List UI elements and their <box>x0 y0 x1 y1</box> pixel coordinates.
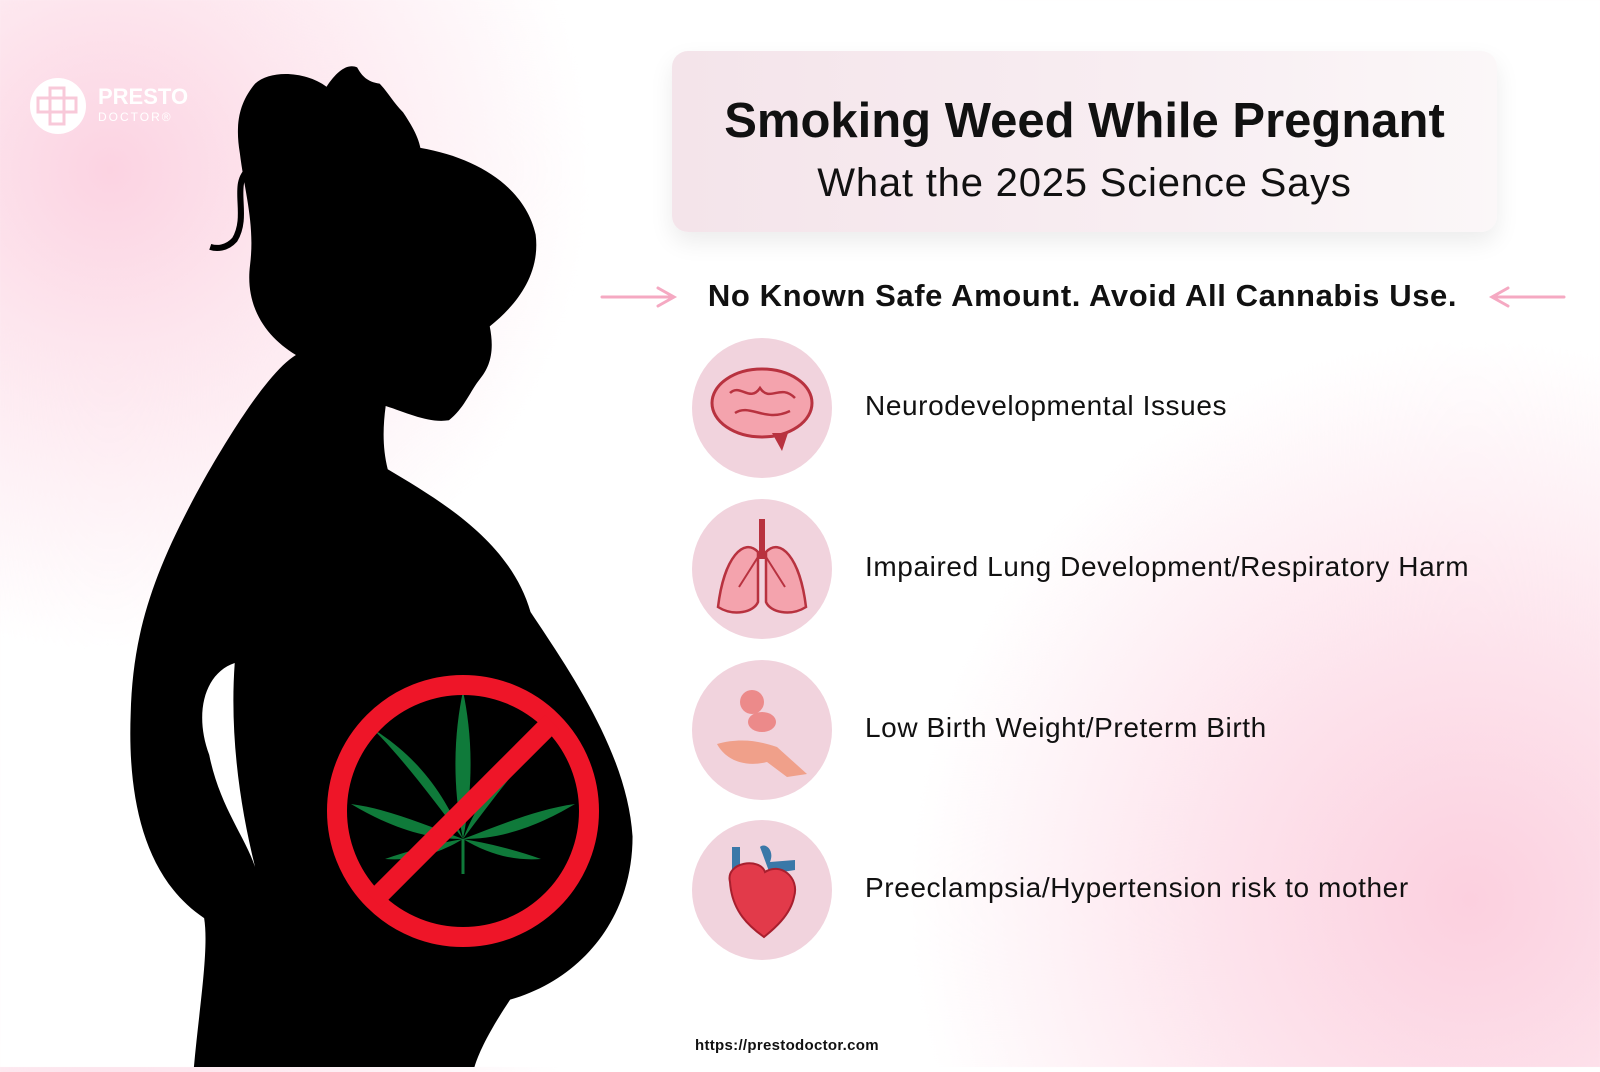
url: https://prestodoctor.com <box>695 1037 879 1054</box>
title box: What the 2025 Science Says <box>817 161 1352 205</box>
silhouette of pregnant woman <box>130 66 633 1067</box>
label: Preeclampsia/Hypertension risk to mother <box>865 872 1409 903</box>
logo <box>30 78 188 134</box>
title box <box>672 51 1497 232</box>
icon: brain <box>710 368 814 451</box>
label: Impaired Lung Development/Respiratory Harm <box>865 551 1469 582</box>
label: Low Birth Weight/Preterm Birth <box>865 712 1267 743</box>
item: baby <box>692 660 1267 800</box>
prohibition sign with cannabis leaf <box>327 675 599 947</box>
icon: fetus in hand <box>717 690 807 777</box>
arrow left <box>600 286 677 308</box>
item: heart <box>692 820 1409 960</box>
item: lungs <box>692 499 1469 639</box>
logo: DOCTOR® <box>98 110 173 124</box>
icon: heart <box>728 846 796 938</box>
logo: PRESTO <box>98 84 188 109</box>
title box: Smoking Weed While Pregnant <box>724 94 1445 148</box>
label: Neurodevelopmental Issues <box>865 390 1227 421</box>
icon: lungs <box>716 519 808 614</box>
arrow right <box>1489 286 1566 308</box>
tagline: No Known Safe Amount. Avoid All Cannabis Use. <box>708 278 1457 313</box>
item: brain <box>692 338 1227 478</box>
